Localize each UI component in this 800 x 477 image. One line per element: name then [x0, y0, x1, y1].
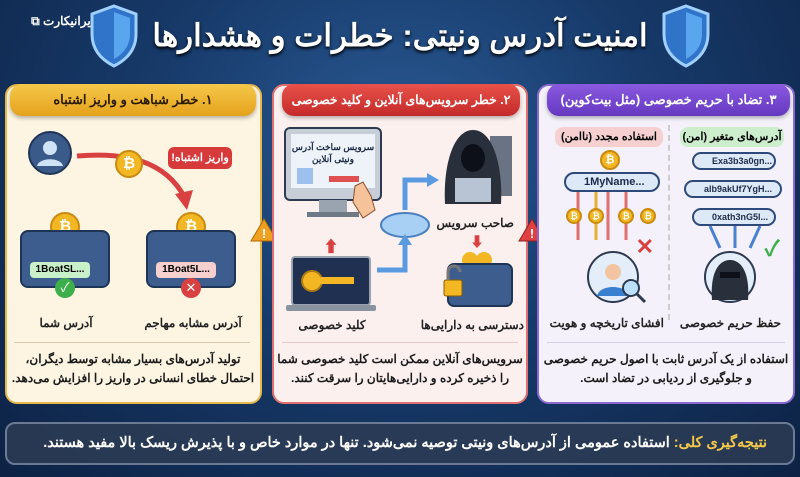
- icon: wallet attacker: 1Boat5L...: [162, 264, 210, 275]
- callout: wrong deposit: [168, 147, 232, 169]
- icon: monitor: سرویس ساخت آدرس: [292, 141, 374, 153]
- icon: shield right: [662, 4, 710, 68]
- text: panel 3 description: استفاده از یک آدرس ثابت با اصول حریم خصوصی و جلوگیری از ردیابی در تضاد است.: [544, 352, 788, 385]
- label: history exposed: افشای تاریخچه و هویت: [550, 316, 664, 330]
- label: private key: کلید خصوصی: [298, 318, 366, 332]
- icon: private hacker: [704, 251, 756, 303]
- icon: exposed user: [587, 251, 646, 303]
- icon: hacker: [444, 130, 512, 204]
- callout: wrong deposit: واریز اشتباه!: [171, 152, 229, 164]
- label: your address: آدرس شما: [39, 316, 93, 330]
- tag: reuse unsafe: استفاده مجدد (ناامن): [561, 131, 657, 143]
- icon: unlocked wallet: [444, 252, 513, 307]
- icon: wallet correct: [20, 212, 110, 298]
- tag: reuse unsafe: [555, 127, 663, 147]
- heading: panel 3: [547, 84, 790, 116]
- heading: panel 3: ۳. تضاد با حریم خصوصی (مثل بیت‌کوین): [560, 92, 776, 107]
- heading: panel 2: ۲. خطر سرویس‌های آنلاین و کلید خصوصی: [292, 93, 510, 107]
- label: service owner: صاحب سرویس: [436, 216, 514, 230]
- title: امنیت آدرس ونیتی: خطرات و هشدارها: [152, 18, 648, 53]
- tag: variable safe: آدرس‌های متغیر (امن): [682, 131, 782, 143]
- heading: panel 1: [10, 84, 256, 116]
- icon: coin: ₿: [123, 155, 135, 172]
- icon: shield left: [90, 4, 138, 68]
- diagram: variable addresses: alb9akUf7YgH...: [704, 184, 772, 194]
- icon: cloud with arrows: [377, 173, 439, 272]
- logo: ایرانیکارت ⧉: [31, 14, 94, 28]
- icon: monitor: ونیتی آنلاین: [312, 153, 354, 165]
- icon: wallet attacker: [146, 212, 236, 298]
- icon: warning left: [250, 218, 272, 242]
- icon: warning left: !: [262, 226, 266, 241]
- icon: monitor: [284, 127, 382, 219]
- label: access to assets: دسترسی به دارایی‌ها: [421, 318, 524, 332]
- icon: red cross: ✕: [636, 234, 654, 259]
- text: panel 1 description: تولید آدرس‌های بسیار مشابه توسط دیگران، احتمال خطای انسانی در واریز را افزایش می‌دهد.: [12, 352, 254, 385]
- arrow: transfer: [76, 152, 193, 210]
- panel: privacy conflict: [537, 84, 795, 404]
- diagram: reuse: [564, 150, 660, 240]
- text: panel 2 description: سرویس‌های آنلاین ممکن است کلید خصوصی شما را ذخیره کرده و دارایی‌هایتان را سرقت کنند.: [277, 352, 523, 385]
- icon: wallet correct: 1BoatSL...: [36, 264, 84, 275]
- label: privacy preserved: حفظ حریم خصوصی: [680, 316, 781, 330]
- icon: wallet correct: ₿: [59, 218, 71, 235]
- diagram: variable addresses: [684, 152, 782, 249]
- icon: wallet attacker: ₿: [185, 218, 197, 235]
- icon: warning right: [518, 218, 537, 242]
- diagram: reuse: 1MyName...: [584, 176, 645, 188]
- heading: panel 1: ۱. خطر شباهت و واریز اشتباه: [53, 92, 213, 107]
- diagram: reuse: ₿: [570, 211, 578, 221]
- diagram: variable addresses: 0xath3nG5l...: [712, 212, 768, 222]
- icon: coin: [115, 150, 143, 178]
- icon: laptop key: [286, 256, 376, 311]
- callout: conclusion bar: [5, 422, 795, 465]
- arrow: down: ⬇: [470, 234, 484, 250]
- diagram: reuse: ₿: [644, 211, 652, 221]
- callout: conclusion bar: نتیجه‌گیری کلی: استفاده عمومی از آدرس‌های ونیتی توصیه نمی‌شود. تنها در موارد خاص و با پذیرش ریسک بالا مفید هستند.: [43, 435, 767, 451]
- panel: similarity risk: [5, 84, 262, 404]
- icon: wallet correct: ✓: [61, 280, 69, 295]
- icon: wallet attacker: ✕: [186, 280, 196, 295]
- label: attacker similar address: آدرس مشابه مهاجم: [144, 316, 242, 330]
- icon: green check: ✓: [764, 236, 780, 261]
- diagram: reuse: ₿: [606, 154, 614, 166]
- heading: panel 2: [282, 84, 520, 116]
- diagram: variable addresses: Exa3b3a0gn...: [712, 156, 772, 166]
- icon: user: [28, 131, 72, 175]
- arrow: up to monitor: ⬆: [323, 239, 339, 256]
- diagram: reuse: ₿: [592, 211, 600, 221]
- diagram: reuse: ₿: [622, 211, 630, 221]
- icon: warning right: !: [530, 226, 534, 241]
- panel: online services: [272, 84, 528, 404]
- tag: variable safe: [680, 127, 784, 147]
